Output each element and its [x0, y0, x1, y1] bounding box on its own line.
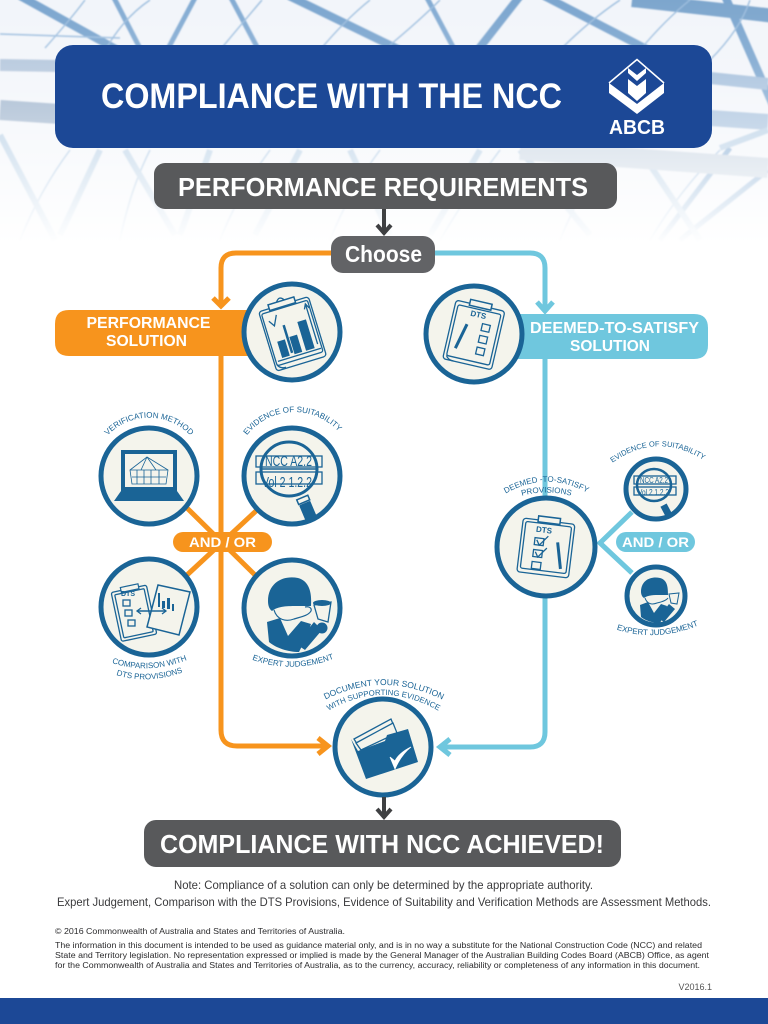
copyright and disclaimer	[55, 927, 710, 970]
icon: magnifier over code reference: Vol 2 1.2.2	[262, 474, 312, 491]
connectors to small circles	[600, 512, 632, 573]
copyright and disclaimer: © 2016 Commonwealth of Australia and States and Territories of Australia.	[55, 927, 345, 936]
icon: DTS clipboard: DTS	[470, 309, 488, 321]
panel: deemed-to-satisfy solution	[490, 314, 708, 359]
background: steel roof structure photo	[0, 0, 768, 245]
small expert judgement	[617, 564, 696, 636]
label: deemed-to-satisfy provisions: DEEMED -TO-SATISFY	[504, 476, 590, 494]
icon: small magnifier: NCC A2.2	[640, 476, 668, 485]
and/or pill: performance: AND / OR	[189, 534, 256, 550]
diagonal connectors	[187, 508, 257, 575]
panel: performance solution: SOLUTION	[106, 333, 187, 350]
note text	[57, 878, 711, 909]
label: document your solution	[324, 679, 444, 711]
document your solution	[324, 679, 444, 798]
title text: COMPLIANCE WITH THE NCC	[101, 77, 562, 116]
and/or pill: performance	[173, 532, 272, 552]
heading: compliance achieved: COMPLIANCE WITH NCC ACHIEVED!	[160, 829, 604, 859]
and/or pill: deemed-to-satisfy	[616, 532, 695, 552]
label: comparison with DTS provisions	[112, 655, 186, 680]
ABCB logo	[609, 60, 665, 139]
footer bar	[0, 998, 768, 1024]
verification method	[98, 412, 200, 526]
icon: clipboard with chart	[244, 284, 340, 380]
note text: Expert Judgement, Comparison with the DTS Provisions, Evidence of Suitability and Verification Methods are Assessment Methods.	[57, 895, 711, 909]
comparison with DTS provisions	[98, 556, 200, 680]
icon: clipboard and chart comparison: DTS	[121, 591, 135, 598]
arrow: to compliance achieved	[377, 797, 391, 818]
icon: engineer with hard hat and plans	[244, 560, 340, 656]
choose button	[331, 236, 435, 273]
label: evidence of suitability: EVIDENCE OF SUITABILITY	[243, 406, 342, 435]
orange flow path	[187, 253, 335, 754]
copyright and disclaimer: State and Territory legislation. No representation expressed or implied is made by the General Manager of the Australian Building Codes Board (ABCB) Office, as agent	[55, 951, 710, 960]
icon: magnifier over code reference: NCC A2.2	[265, 453, 312, 470]
icon: magnifier over code reference	[244, 428, 340, 524]
label: document your solution: WITH SUPPORTING EVIDENCE	[326, 690, 440, 711]
choose button: Choose	[345, 241, 422, 267]
title banner	[55, 45, 712, 148]
label: verification method: VERIFICATION METHOD	[104, 412, 193, 434]
note text: Note: Compliance of a solution can only be determined by the appropriate authority.	[174, 878, 593, 892]
icon: laptop with house model	[101, 428, 197, 524]
icon: checked DTS clipboard: DTS	[536, 525, 553, 536]
small evidence of suitability	[610, 441, 706, 522]
panel: deemed-to-satisfy solution: DEEMED-TO-SATISFY	[530, 320, 699, 337]
panel: performance solution	[55, 310, 260, 356]
deemed-to-satisfy provisions	[494, 476, 598, 598]
label: evidence of suitability: EVIDENCE OF SUITABILITY	[610, 441, 706, 462]
arrow: requirements to choose	[377, 209, 391, 234]
icon: small magnifier	[626, 459, 686, 519]
label: deemed-to-satisfy provisions: PROVISIONS	[521, 487, 572, 496]
evidence of suitability	[242, 406, 342, 526]
label: comparison with DTS provisions: DTS PROVISIONS	[116, 668, 182, 680]
blue flow path	[432, 253, 632, 755]
ABCB logo: ABCB	[609, 117, 665, 139]
and/or pill: deemed-to-satisfy: AND / OR	[622, 534, 689, 550]
copyright and disclaimer: The information in this document is intended to be used as guidance material only, and is in no way a substitute for the National Construction Code (NCC) and related	[55, 941, 702, 950]
heading: compliance achieved	[144, 820, 621, 867]
label: expert judgement: EXPERT JUDGEMENT	[252, 654, 332, 667]
expert judgement	[242, 558, 342, 667]
heading: performance requirements	[154, 163, 617, 209]
icon: small engineer	[627, 567, 685, 625]
heading: performance requirements: PERFORMANCE REQUIREMENTS	[178, 172, 588, 202]
label: comparison with DTS provisions: COMPARISON WITH	[112, 655, 186, 668]
label: document your solution: DOCUMENT YOUR SOLUTION	[324, 679, 444, 700]
icon: DTS clipboard	[426, 286, 522, 382]
panel: deemed-to-satisfy solution: SOLUTION	[570, 338, 650, 355]
copyright and disclaimer: for the Commonwealth of Australia and States and Territories of Australia, as to the currency, accuracy, reliability or completeness of any information in this document.	[55, 961, 700, 970]
icon: small magnifier: Vol 2 1.2.2	[638, 488, 669, 497]
version label: V2016.1	[678, 982, 712, 992]
panel: performance solution: PERFORMANCE	[86, 315, 211, 332]
label: expert judgement: EXPERT JUDGEMENT	[617, 620, 696, 636]
icon: folder with tick	[335, 699, 431, 795]
